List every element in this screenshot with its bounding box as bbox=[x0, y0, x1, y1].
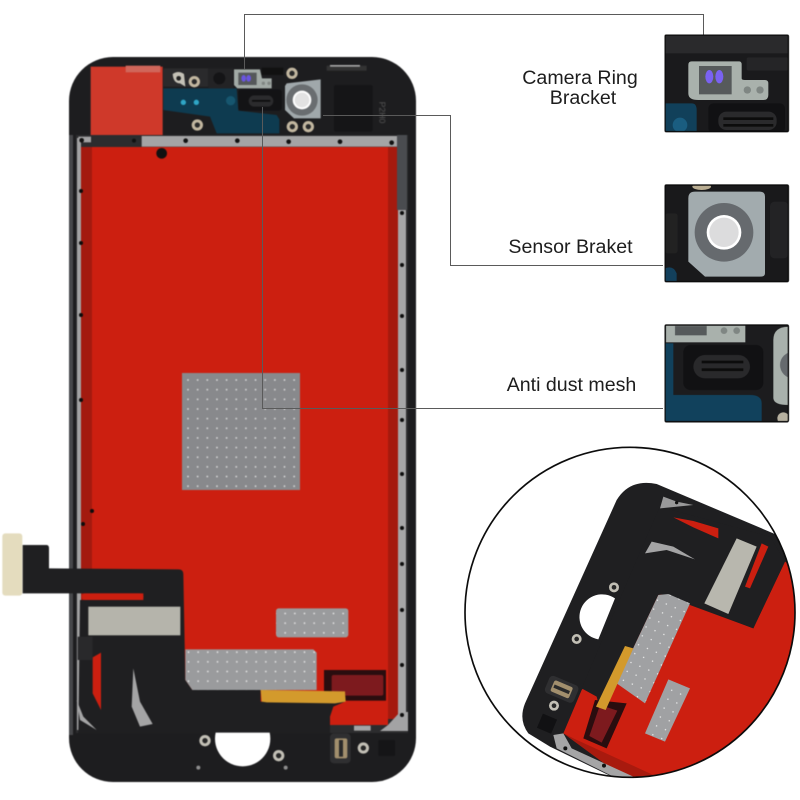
label: camera ring bracket: Bracket bbox=[550, 87, 617, 109]
rotated small grey patch bbox=[645, 679, 690, 742]
connector tab bbox=[2, 533, 22, 596]
rotated silver edge bbox=[553, 733, 633, 778]
bottom screws bbox=[199, 735, 369, 761]
label: camera ring bracket: Camera Ring bbox=[522, 67, 638, 89]
thumbnails bbox=[665, 35, 800, 424]
red film tab bbox=[91, 67, 163, 135]
callout lines bbox=[244, 14, 704, 408]
inset circle outline bbox=[465, 447, 795, 777]
camera ring bracket bbox=[234, 69, 272, 88]
sensor bracket bbox=[285, 79, 321, 118]
home button hole bbox=[215, 733, 270, 766]
top components: P2H0 bbox=[377, 102, 387, 124]
rotated grey sliver bbox=[645, 542, 695, 559]
small grey patch bbox=[276, 608, 348, 637]
circular inset: rotated lower phone view bbox=[465, 447, 800, 800]
screws bbox=[189, 68, 314, 132]
thumbnail: sensor bracket bbox=[665, 183, 788, 282]
anti dust mesh bbox=[238, 89, 282, 111]
right module bbox=[334, 85, 373, 132]
rotated silver shield bbox=[704, 538, 757, 614]
rotated grey patch bbox=[617, 594, 690, 703]
thumbnail: camera ring bracket bbox=[665, 35, 788, 133]
dark red module bbox=[324, 670, 386, 701]
orange flex strip bbox=[261, 690, 346, 703]
flex cable bbox=[23, 545, 345, 733]
rotated connector bbox=[545, 676, 578, 702]
rotated screws bbox=[549, 582, 619, 711]
blue flex bbox=[163, 88, 279, 133]
top components bbox=[78, 65, 407, 210]
top silver strip bbox=[142, 136, 397, 147]
lower grey patch bbox=[185, 649, 317, 690]
rotated flex bbox=[582, 562, 785, 700]
rotated dark red module bbox=[583, 700, 627, 748]
rotated black bezel bbox=[522, 482, 786, 776]
small bracket bbox=[173, 72, 185, 87]
rotated red slivers bbox=[673, 517, 718, 538]
label: sensor bracket: Sensor Braket bbox=[508, 236, 633, 258]
phone screen assembly bbox=[2, 57, 416, 782]
red cutout and grey sliver bbox=[93, 653, 101, 710]
red protective film bbox=[92, 147, 388, 725]
rotated home hole bbox=[579, 594, 615, 639]
rotated orange strip bbox=[596, 646, 633, 710]
rotated red film bbox=[563, 562, 800, 787]
black frame bbox=[69, 57, 416, 782]
centre grey patch bbox=[182, 373, 300, 490]
inner rear panel bbox=[69, 135, 408, 735]
side screw holes bbox=[79, 189, 404, 717]
label: anti dust mesh: Anti dust mesh bbox=[507, 374, 636, 396]
lower flex assembly bbox=[2, 533, 395, 770]
thumbnail: anti dust mesh bbox=[665, 325, 788, 422]
silver shield bbox=[88, 607, 180, 635]
bottom connector bbox=[330, 733, 351, 763]
